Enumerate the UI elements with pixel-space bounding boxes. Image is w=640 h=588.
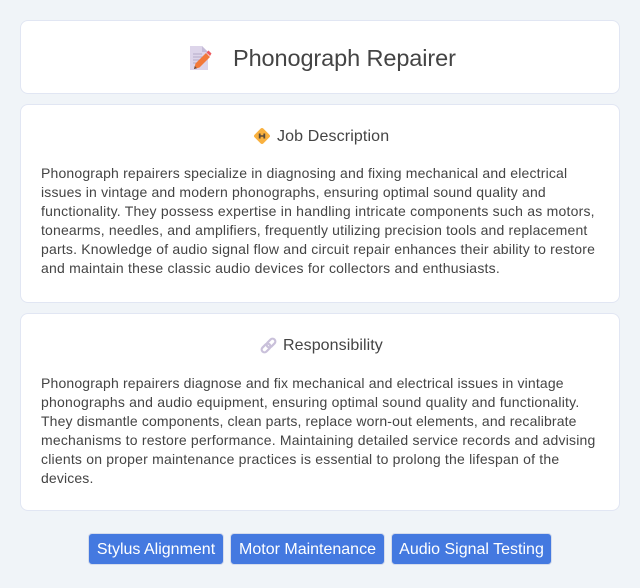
icon: document with pencil bbox=[190, 46, 212, 70]
icon: job diamond bbox=[254, 128, 270, 144]
text block: responsibility: devices. bbox=[41, 470, 93, 486]
heading: responsibility: Responsibility bbox=[283, 337, 383, 354]
panel: title card bbox=[20, 20, 620, 94]
text block: responsibility: phonographs and audio equipment, ensuring optimal sound quality and functionality. bbox=[41, 394, 579, 410]
panel: job description bbox=[20, 104, 620, 303]
icon: link bbox=[260, 338, 276, 354]
tag: stylus alignment bbox=[88, 533, 224, 565]
text block: responsibility: They dismantle components, clean parts, replace worn-out elements, and recalibrate bbox=[41, 413, 577, 429]
tag: audio signal testing: Audio Signal Testing bbox=[399, 541, 544, 558]
text block: job description: parts. Knowledge of audio signal flow and circuit repair enhances their ability to restore bbox=[41, 241, 595, 257]
tag: stylus alignment: Stylus Alignment bbox=[97, 541, 215, 558]
text block: responsibility: clients on proper maintenance practices is essential to prolong the lifespan of the bbox=[41, 451, 559, 467]
tag: audio signal testing bbox=[391, 533, 552, 565]
text block: job description: functionality. They possess expertise in handling intricate components such as motors, bbox=[41, 203, 595, 219]
text block: responsibility: mechanisms to restore performance. Maintaining detailed service records and advising bbox=[41, 432, 596, 448]
text block: job description: issues in vintage and modern phonographs, ensuring optimal sound quality and bbox=[41, 184, 546, 200]
text block: job description: tonearms, needles, and amplifiers, frequently utilizing precision tools and replacement bbox=[41, 222, 587, 238]
text block: job description bbox=[41, 165, 595, 276]
heading: job description: Job Description bbox=[277, 128, 389, 145]
panel: responsibility bbox=[20, 313, 620, 511]
text block: responsibility bbox=[41, 375, 596, 486]
tag: motor maintenance: Motor Maintenance bbox=[239, 541, 376, 558]
text block: responsibility: Phonograph repairers diagnose and fix mechanical and electrical issues in vintage bbox=[41, 375, 564, 391]
tag: motor maintenance bbox=[230, 533, 385, 565]
title: Phonograph Repairer bbox=[233, 45, 456, 71]
text block: job description: Phonograph repairers specialize in diagnosing and fixing mechanical and electrical bbox=[41, 165, 567, 181]
text block: job description: and maintain these classic audio devices for collectors and enthusiasts. bbox=[41, 260, 500, 276]
